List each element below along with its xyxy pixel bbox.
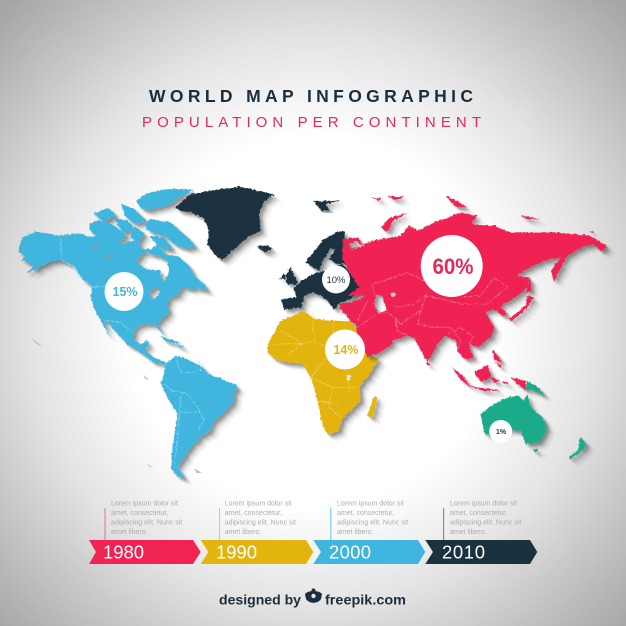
timeline item: 2000: Lorem ipsum dolor sit [337,500,404,508]
data badge: Europe 10%: 10% [326,275,346,286]
map: North and South America [18,188,237,477]
data badge: Africa 14% [325,330,365,370]
South America [160,355,237,477]
timeline item: 1990: Lorem ipsum dolor sit [225,500,292,508]
timeline item: 1980: adipiscing elit. Nunc sit [111,520,182,526]
data badge: Oceania 1% [489,420,512,443]
data badge: North America 15% [104,272,144,311]
country borders [60,235,203,467]
map: Svalbard [313,199,339,211]
map: Africa [267,310,379,434]
map: Oceania [479,380,586,458]
icon: freepik logo [305,588,322,603]
timeline item: 1980: Lorem ipsum dolor sit [111,500,178,508]
data badge: Africa 14%: 14% [333,343,359,357]
map: small Pacific islands [31,337,202,473]
Caribbean islands [158,335,183,348]
footer credit: designed by [219,592,301,608]
subtitle: POPULATION PER CONTINENT [142,114,481,131]
map: Asia [338,195,607,390]
timeline item: 1980: amet libero. [111,529,148,536]
map: Greenland and Iceland [175,186,274,260]
Arctic islands [370,195,594,232]
timeline item: 1980: 1980 [103,542,144,562]
timeline item: 2000: 2000 [329,542,371,562]
timeline item: 2000: amet, consectetur, [337,510,394,517]
timeline item: 2010: Lorem ipsum dolor sit [450,500,517,508]
timeline item: 1980 [89,500,201,564]
data badge: Asia 60%: 60% [432,254,474,279]
timeline item: 1980: amet, consectetur, [111,510,168,517]
timeline item: 2000 [313,500,425,564]
data badge: North America 15%: 15% [112,285,138,299]
timeline item: 2010: amet libero. [450,529,487,536]
timeline item: 2010: adipiscing elit. Nunc sit [450,520,521,526]
footer credit: freepik.com [325,592,406,608]
timeline item: 2000: amet libero. [337,529,374,536]
North America mainland [18,231,207,364]
country borders [357,272,507,350]
map: Europe [278,230,360,309]
data badge: Oceania 1%: 1% [496,429,507,436]
timeline item: 2000: adipiscing elit. Nunc sit [337,520,408,526]
timeline item: 1990: amet, consectetur, [225,510,282,517]
footer credit [219,588,406,608]
timeline item: 1990 [201,500,313,564]
timeline item: 1990: amet libero. [225,529,261,536]
title: WORLD MAP INFOGRAPHIC [149,86,473,106]
timeline item: 1990: adipiscing elit. Nunc sit [225,520,296,526]
Arctic islands [88,188,206,289]
Southeast Asia islands [426,348,525,390]
timeline item: 1990: 1990 [216,542,257,562]
Japan [508,276,533,321]
timeline item: 2010: 2010 [442,542,485,562]
timeline item: 2010 [425,500,537,564]
timeline item: 2010: amet, consectetur, [450,510,507,517]
data badge: Europe 10% [322,266,350,294]
data badge: Asia 60% [421,235,483,297]
